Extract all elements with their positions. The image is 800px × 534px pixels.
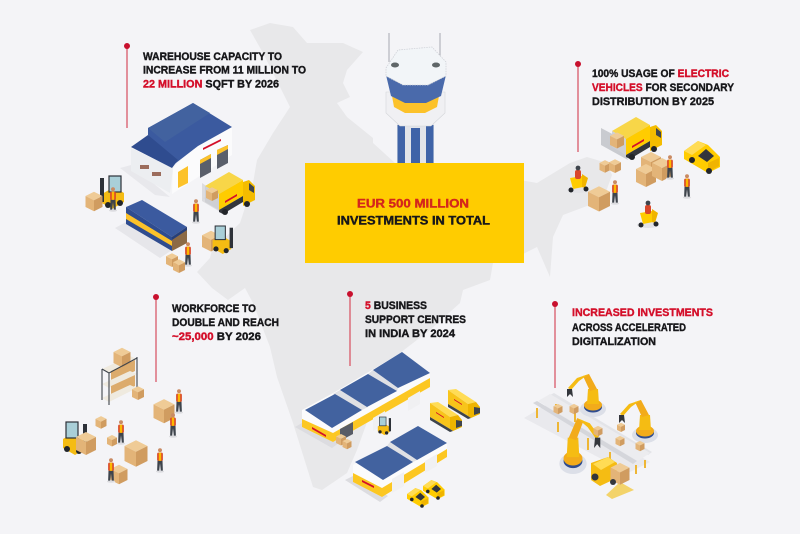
antennas xyxy=(389,33,440,62)
illustration: forklift xyxy=(63,422,96,455)
text: digitalization xyxy=(572,307,713,348)
tower column xyxy=(397,122,434,164)
illustration: loose cargo xyxy=(166,226,233,273)
text: workforce: WORKFORCE TO xyxy=(172,303,256,315)
illustration: forklift with pallet xyxy=(86,176,124,212)
illustration: yellow truck xyxy=(192,172,255,224)
roof deck xyxy=(386,47,446,85)
central headline box: INVESTMENTS IN TOTAL xyxy=(337,214,490,228)
blue cab xyxy=(386,75,446,103)
illustration: forklift and parcels xyxy=(336,417,391,449)
illustration: robot arms xyxy=(559,374,658,474)
central headline box xyxy=(305,163,524,263)
panel: business support centres xyxy=(295,291,480,508)
text: digitalization: DIGITALIZATION xyxy=(572,336,656,348)
text: business support centres: 5 BUSINESS xyxy=(365,300,427,312)
text: workforce: DOUBLE AND REACH xyxy=(172,317,279,329)
central tower xyxy=(386,33,446,164)
illustration: conveyor belts xyxy=(524,393,652,474)
illustration: shelf xyxy=(102,348,144,405)
text: business support centres xyxy=(365,300,466,340)
pin xyxy=(124,43,130,128)
text: business support centres: IN INDIA BY 2024 xyxy=(365,328,456,340)
panel: workforce xyxy=(63,294,279,484)
text: electric vehicles xyxy=(592,68,735,108)
text: warehouse capacity xyxy=(143,51,306,90)
text: digitalization: INCREASED INVESTMENTS xyxy=(572,307,713,319)
illustration: three-unit warehouse xyxy=(295,352,430,448)
text: workforce xyxy=(172,303,279,343)
illustration: two-unit warehouse xyxy=(345,426,447,502)
pin xyxy=(347,291,353,366)
text: digitalization: ACROSS ACCELERATED xyxy=(572,322,686,334)
illustration: warehouse building xyxy=(120,103,232,197)
illustration: yellow vans xyxy=(407,480,445,508)
roof vents xyxy=(391,62,440,68)
text: warehouse capacity: 22 MILLION SQFT BY 2026 xyxy=(143,78,279,90)
illustration: electric van xyxy=(684,141,720,174)
text: workforce: ~25,000 BY 2026 xyxy=(172,331,261,343)
illustration: parcels on conveyor xyxy=(554,404,644,451)
illustration: yellow trucks xyxy=(430,389,480,432)
text: electric vehicles: DISTRIBUTION BY 2025 xyxy=(592,96,714,108)
text: warehouse capacity: INCREASE FROM 11 MILLION TO xyxy=(143,64,306,76)
illustration: delivery truck xyxy=(601,117,662,160)
India map silhouette xyxy=(197,23,612,490)
text: electric vehicles: VEHICLES FOR SECONDARY xyxy=(592,82,735,94)
text: warehouse capacity: WAREHOUSE CAPACITY TO xyxy=(143,51,282,63)
panel: electric vehicles xyxy=(567,61,735,228)
illustration: yellow forklift xyxy=(591,457,634,499)
text: electric vehicles: 100% USAGE OF ELECTRIC xyxy=(592,68,729,80)
central headline box: EUR 500 MILLION xyxy=(357,196,469,210)
pin xyxy=(575,61,581,152)
illustration: boxes and workers xyxy=(96,389,183,484)
pin xyxy=(552,301,558,388)
text: business support centres: SUPPORT CENTRES xyxy=(365,314,466,326)
illustration: container xyxy=(115,200,187,258)
illustration: parcels and workers xyxy=(600,152,691,199)
lower deck xyxy=(386,92,445,126)
illustration: scooters and pallet xyxy=(567,166,659,228)
yellow band xyxy=(392,96,439,113)
pin xyxy=(153,294,159,382)
panel: digitalization xyxy=(524,301,713,499)
panel: warehouse capacity xyxy=(86,43,306,273)
